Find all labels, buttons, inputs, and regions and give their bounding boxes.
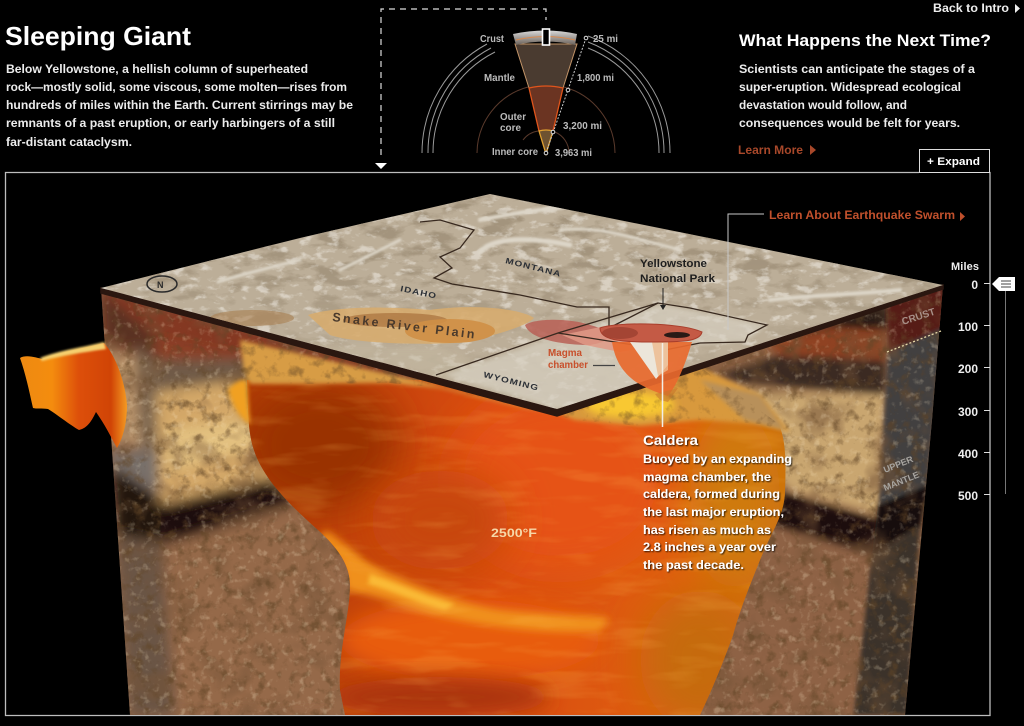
- dashed connector: [381, 9, 546, 155]
- caldera text block: [643, 432, 792, 572]
- diagram labels: 3,963 mi: [555, 148, 592, 159]
- intro text block: hundreds of miles within the Earth. Current stirrings may be: [6, 98, 353, 112]
- caldera and magma chamber: [600, 324, 702, 402]
- diagram labels: Mantle: [484, 73, 515, 84]
- caldera text block: caldera, formed during: [643, 489, 780, 501]
- diagram labels: Crust: [480, 34, 505, 45]
- expand button: + Expand: [927, 156, 980, 168]
- crust label: CRUST: [901, 307, 937, 328]
- down arrow: [375, 163, 387, 169]
- Yellowstone National Park label: Yellowstone: [640, 258, 707, 270]
- caldera text block: magma chamber, the: [643, 472, 771, 484]
- mantle arcs: [422, 36, 670, 153]
- cube cross-section: [20, 190, 965, 726]
- diagram labels: Outer: [500, 112, 526, 123]
- caldera text block: Caldera: [643, 432, 698, 448]
- diagram labels: core: [500, 123, 521, 134]
- compass: [147, 276, 177, 292]
- earthquake swarm callout: Learn About Earthquake Swarm: [769, 208, 955, 222]
- depth scale: 200: [958, 362, 978, 376]
- title: Sleeping Giant: [5, 21, 191, 51]
- next-time text block: [739, 62, 975, 130]
- intro text block: rock—mostly solid, some viscous, some molten—rises from: [6, 80, 347, 94]
- next-time text block: devastation would follow, and: [739, 98, 907, 112]
- locator marker: [542, 29, 550, 45]
- frame: [6, 172, 990, 716]
- next-time text block: consequences would be felt for years.: [739, 116, 960, 130]
- gold rim above magma left: [240, 340, 557, 413]
- depth scale: Miles: [951, 261, 979, 273]
- upper mantle label: [882, 454, 921, 493]
- rock faces: [90, 280, 950, 720]
- upper mantle label: UPPER: [882, 454, 915, 475]
- diagram labels: [480, 34, 618, 159]
- caldera leader line: [662, 343, 664, 427]
- diagram labels: 25 mi: [593, 34, 618, 45]
- next-time text block: super-eruption. Widespread ecological: [739, 80, 961, 94]
- diagram labels: 1,800 mi: [577, 73, 614, 84]
- depth scale: [951, 261, 1015, 503]
- caldera text block: the past decade.: [643, 560, 744, 572]
- map plate top: [100, 190, 950, 416]
- intro text block: [6, 62, 353, 149]
- next-time heading: What Happens the Next Time?: [739, 31, 991, 50]
- Montana label: MONTANA: [505, 256, 562, 279]
- temperature label: 2500°F: [491, 526, 537, 540]
- caldera text block: 2.8 inches a year over: [643, 542, 777, 554]
- next-time text block: Scientists can anticipate the stages of a: [739, 62, 975, 76]
- upper mantle label: MANTLE: [882, 470, 921, 493]
- Snake River Plain label: Snake River Plain: [332, 310, 475, 341]
- magma chamber label: [548, 348, 615, 371]
- expand button: [920, 150, 990, 172]
- intro text block: remnants of a past eruption, or early harbingers of a still: [6, 116, 335, 130]
- Yellowstone National Park label: National Park: [640, 273, 716, 285]
- Wyoming label: WYOMING: [483, 370, 540, 392]
- earthquake swarm callout: [728, 208, 965, 330]
- left face layers: [102, 294, 420, 715]
- depth scale: 100: [958, 320, 978, 334]
- magma plume: [247, 380, 786, 715]
- caldera text block: has risen as much as: [643, 525, 771, 537]
- depth scale: 300: [958, 405, 978, 419]
- caldera text block: Buoyed by an expanding: [643, 454, 792, 466]
- right face layers: [722, 308, 890, 557]
- intro text block: far-distant cataclysm.: [6, 135, 132, 149]
- gold rim above magma right: [557, 367, 790, 432]
- wedge: [515, 44, 577, 88]
- light ridges: [218, 205, 900, 300]
- rim texture: [236, 344, 786, 430]
- depth scale: 0: [971, 278, 978, 292]
- core arcs: [477, 87, 615, 153]
- side flare: [228, 380, 250, 425]
- depth line: [546, 38, 586, 153]
- magma chamber label: Magma: [548, 348, 582, 359]
- diagram labels: 3,200 mi: [563, 121, 602, 132]
- learn more link: Learn More: [738, 143, 803, 157]
- magma lobe on left: [20, 343, 127, 448]
- front beige: [318, 345, 483, 390]
- depth scale: 500: [958, 489, 978, 503]
- depth scale: 400: [958, 447, 978, 461]
- magma chamber label: chamber: [548, 360, 588, 371]
- dotted crust boundary: [887, 331, 941, 352]
- diagram labels: Inner core: [492, 147, 538, 158]
- intro text block: Below Yellowstone, a hellish column of superheated: [6, 62, 308, 76]
- back-half terrain: [109, 195, 936, 341]
- right strip: [854, 283, 945, 715]
- Earth cross-section locator diagram: [375, 9, 670, 169]
- snake river plain: [210, 307, 534, 344]
- pink magma patch: [525, 320, 609, 345]
- caldera text block: the last major eruption,: [643, 507, 784, 519]
- compass: N: [157, 280, 164, 290]
- Yellowstone National Park label: [640, 258, 716, 310]
- Idaho label: IDAHO: [400, 284, 438, 300]
- rock texture: [90, 280, 950, 720]
- slider handle: [992, 277, 1015, 291]
- back to intro link: Back to Intro: [933, 3, 1009, 15]
- state borders: [420, 220, 767, 375]
